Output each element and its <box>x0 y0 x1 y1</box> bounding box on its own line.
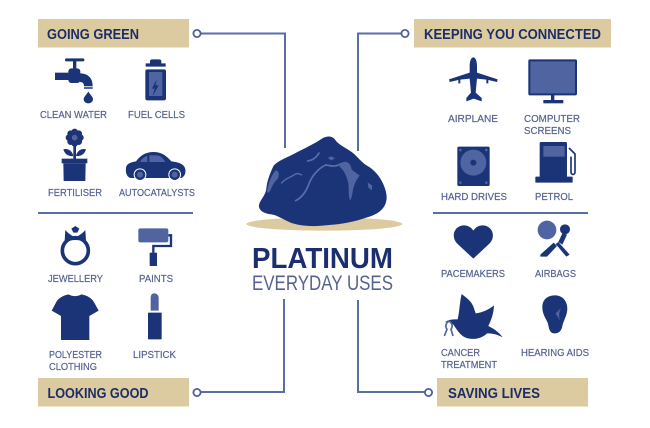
label: computer screens: SCREENS <box>524 125 571 137</box>
heading: looking good: LOOKING GOOD <box>48 386 148 402</box>
label: fuel cells: FUEL CELLS <box>128 109 185 121</box>
icon: clean water tap <box>55 58 93 103</box>
label: pacemakers: PACEMAKERS <box>441 268 505 280</box>
icon: hard drive <box>457 147 490 186</box>
label: airbags: AIRBAGS <box>535 268 576 280</box>
connector: going green <box>193 30 285 148</box>
subtitle: EVERYDAY USES <box>252 271 393 295</box>
icon: jewellery ring <box>62 226 88 264</box>
icon: fertiliser flower pot <box>62 129 87 181</box>
icon: cancer treatment dove with ribbon <box>444 294 503 339</box>
label: hard drives: HARD DRIVES <box>441 191 507 203</box>
label: cancer treatment: TREATMENT <box>441 359 498 371</box>
title: PLATINUM <box>252 243 393 275</box>
icon: airbag <box>538 221 570 257</box>
heading: keeping you connected <box>414 19 611 48</box>
heading: looking good <box>38 378 189 406</box>
icon: lipstick <box>148 293 162 339</box>
connector: keeping you connected <box>358 30 409 151</box>
icon: fuel cell battery <box>145 59 166 100</box>
icon: polyester t-shirt <box>52 294 99 340</box>
heading: going green <box>38 19 189 48</box>
icon: paint roller <box>138 228 171 266</box>
connector: looking good <box>193 299 284 396</box>
label: polyester clothing: CLOTHING <box>49 361 97 373</box>
label: autocatalysts: AUTOCATALYSTS <box>119 187 195 199</box>
label: cancer treatment: CANCER <box>441 347 480 359</box>
label: clean water: CLEAN WATER <box>40 109 107 121</box>
icon: pacemaker heart <box>454 225 493 259</box>
label: petrol: PETROL <box>535 191 573 203</box>
label: fertiliser: FERTILISER <box>48 187 102 199</box>
icon: petrol pump <box>535 142 575 183</box>
icon: computer screen <box>529 60 576 103</box>
label: computer screens: COMPUTER <box>524 113 580 125</box>
label: jewellery: JEWELLERY <box>48 273 103 285</box>
heading: saving lives: SAVING LIVES <box>448 386 540 402</box>
heading: going green: GOING GREEN <box>47 27 139 43</box>
central rock illustration <box>246 136 402 231</box>
icon: airplane <box>449 57 498 101</box>
icon: autocatalysts car <box>126 152 185 181</box>
title <box>252 243 393 295</box>
label: polyester clothing: POLYESTER <box>49 349 102 361</box>
label: paints: PAINTS <box>139 273 173 285</box>
icon: hearing aid ear <box>542 295 567 333</box>
connector: saving lives <box>358 300 432 396</box>
label: hearing aids: HEARING AIDS <box>521 347 589 359</box>
heading: keeping you connected: KEEPING YOU CONNECTED <box>424 27 601 43</box>
label: airplane: AIRPLANE <box>448 113 498 125</box>
heading: saving lives <box>437 378 588 406</box>
label: lipstick: LIPSTICK <box>133 349 176 361</box>
